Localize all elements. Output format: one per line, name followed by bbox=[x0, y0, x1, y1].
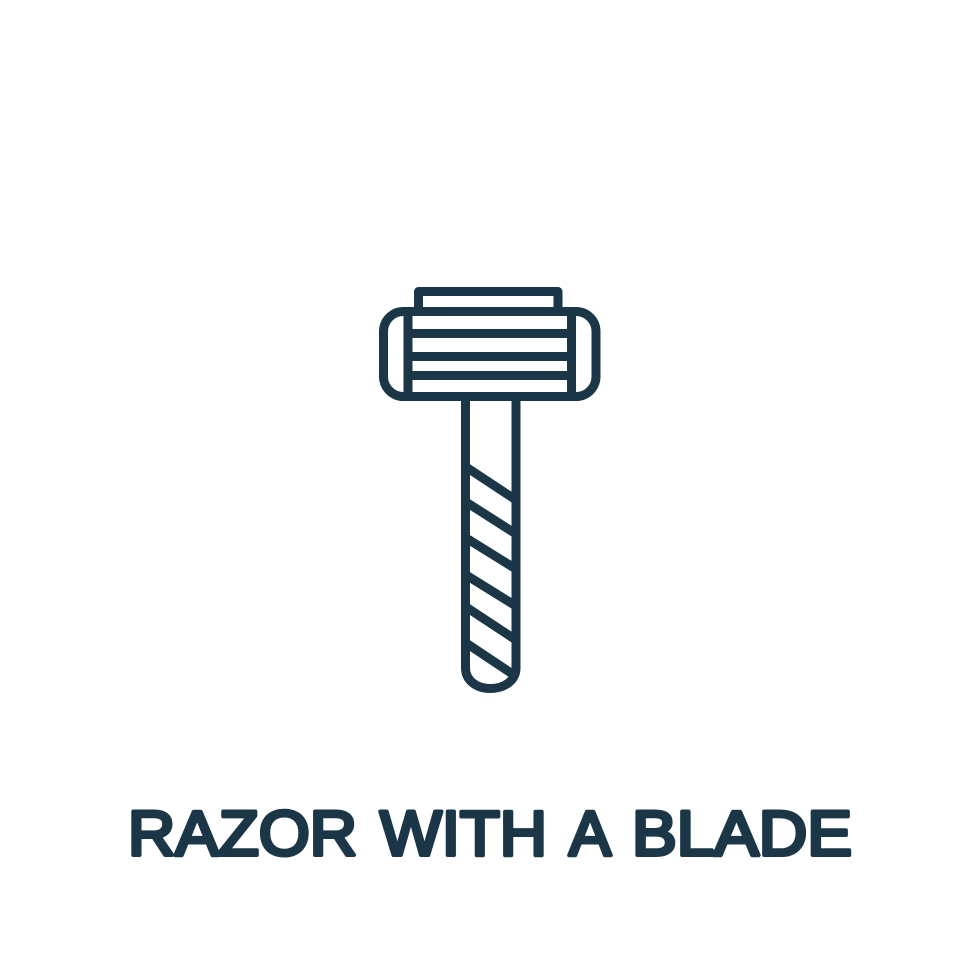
icon: razor with a blade bbox=[384, 292, 596, 688]
razor top guard bbox=[418, 292, 558, 307]
razor handle bbox=[466, 396, 516, 688]
razor cartridge head bbox=[384, 312, 596, 396]
title: RAZOR bbox=[128, 799, 357, 869]
title: WITH bbox=[380, 799, 547, 869]
title: BLADE bbox=[632, 799, 852, 869]
title: A bbox=[569, 799, 612, 869]
title bbox=[128, 799, 852, 869]
